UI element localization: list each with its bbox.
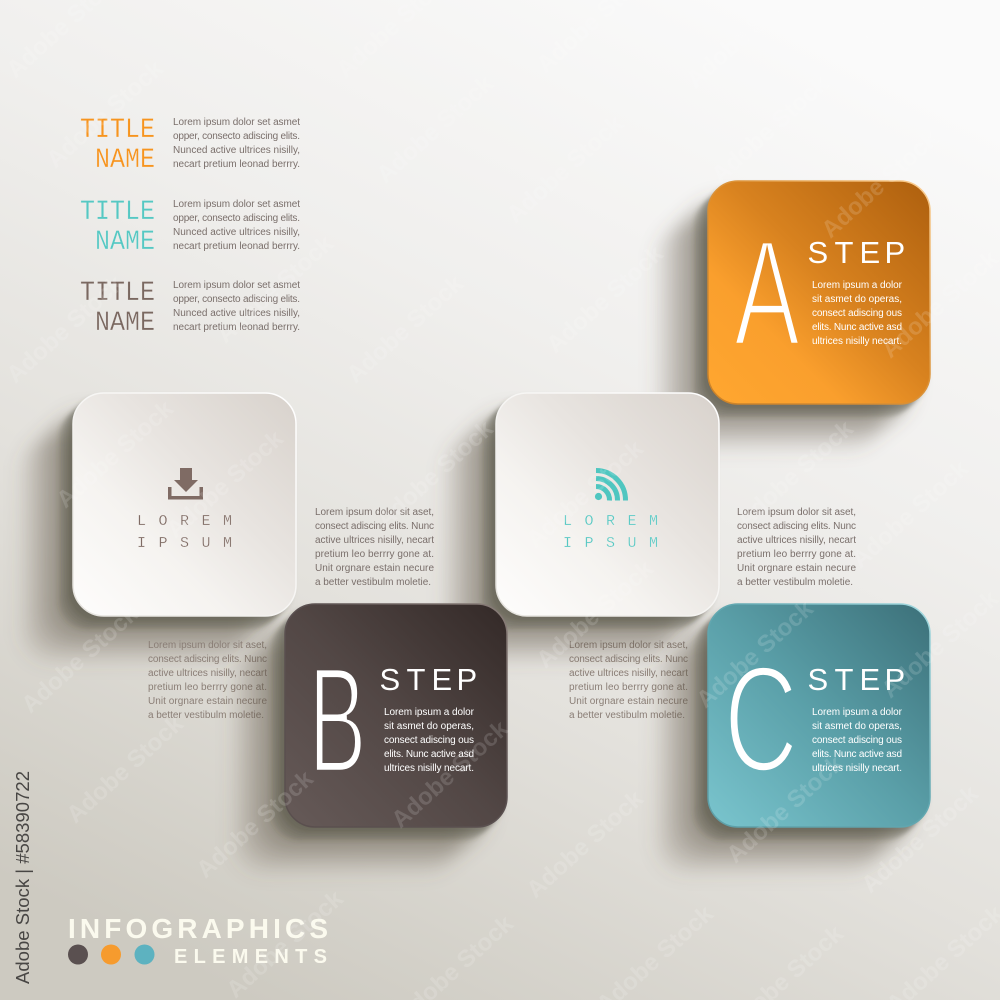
title: brown: [80, 278, 155, 339]
text block: right paragraph: consect adiscing elits. Nunc: [737, 521, 856, 532]
label: lorem ipsum: LOREM: [563, 513, 658, 530]
watermark: Adobe Stock: [191, 765, 319, 884]
text block: teal description: opper, consecto adiscing elits.: [173, 213, 300, 224]
text block: lower centre paragraph: pretium leo berrry gone at.: [569, 682, 688, 693]
text block: middle paragraph: consect adiscing elits. Nunc: [315, 521, 434, 532]
text block: right paragraph: a better vestibulm moletie.: [737, 577, 853, 588]
text block: brown description: Nunced active ultrices nisilly,: [173, 308, 300, 319]
text block: step C description: consect adiscing ous: [812, 735, 902, 746]
title: teal: NAME: [95, 227, 155, 258]
card surface: [708, 181, 930, 404]
text block: teal description: necart pretium leonad berrry.: [173, 241, 300, 252]
text block: step B description: elits. Nunc active asd: [384, 749, 474, 760]
text block: step A description: ultrices nisilly necart.: [812, 336, 902, 347]
letter C: C: [724, 634, 798, 803]
shadow: card A: [656, 184, 928, 450]
watermark: Adobe Stock: [856, 780, 984, 899]
title: teal: [80, 197, 155, 258]
watermark: Adobe Stock: [501, 110, 629, 229]
watermark: Adobe Stock: [706, 70, 834, 189]
watermark: Adobe Stock: [521, 785, 649, 904]
shadow: card B: [233, 607, 505, 873]
text block: lower centre paragraph: active ultrices nisilly, necart: [569, 668, 688, 679]
icon: signal: [595, 470, 626, 500]
text block: step A description: elits. Nunc active asd: [812, 322, 902, 333]
stock id vertical label: Adobe Stock | #58390722: [12, 771, 33, 984]
text block: teal description: [173, 199, 300, 252]
letter B: B: [308, 635, 366, 804]
text block: lower centre paragraph: a better vestibulm moletie.: [569, 710, 685, 721]
watermark: Adobe Stock: [731, 415, 859, 534]
text block: lower centre paragraph: Unit orgnare estain necure: [569, 696, 688, 707]
card surface: [708, 604, 930, 827]
watermark: Adobe Stock: [1, 270, 129, 389]
watermark: Adobe Stock: [876, 585, 1000, 704]
title: brown: TITLE: [80, 278, 155, 309]
panel: step B: [285, 604, 507, 827]
watermark: Adobe Stock: [41, 55, 169, 174]
text block: right paragraph: Lorem ipsum dolor sit aset,: [737, 507, 856, 518]
text block: right paragraph: [737, 507, 856, 588]
card surface: [285, 604, 507, 827]
watermark: Adobe Stock: [541, 240, 669, 359]
heading: step: STEP: [808, 235, 905, 270]
panel: white download card: [73, 393, 296, 616]
text block: orange description: necart pretium leonad berrry.: [173, 159, 300, 170]
watermark: Adobe Stock: [51, 395, 179, 514]
title: orange: [80, 115, 155, 176]
text block: lower left paragraph: consect adiscing elits. Nunc: [148, 654, 267, 665]
text block: lower centre paragraph: Lorem ipsum dolor sit aset,: [569, 640, 688, 651]
panel: step A: [708, 181, 930, 404]
text block: teal description: Nunced active ultrices nisilly,: [173, 227, 300, 238]
text block: middle paragraph: Unit orgnare estain necure: [315, 563, 434, 574]
label: lorem ipsum: [137, 513, 232, 552]
text block: brown description: Lorem ipsum dolor set asmet: [173, 280, 300, 291]
watermark: Adobe Stock: [161, 425, 289, 544]
text block: lower left paragraph: a better vestibulm moletie.: [148, 710, 264, 721]
text block: step C description: elits. Nunc active asd: [812, 749, 902, 760]
text block: lower left paragraph: Unit orgnare estain necure: [148, 696, 267, 707]
card surface: [496, 393, 719, 616]
watermark: Adobe Stock: [691, 595, 819, 714]
watermark: Adobe Stock: [61, 710, 189, 829]
heading: step: STEP: [380, 662, 477, 697]
label: lorem ipsum: IPSUM: [563, 535, 658, 552]
footer heading: elements: ELEMENTS: [174, 946, 327, 968]
label: lorem ipsum: IPSUM: [137, 535, 232, 552]
text block: step B description: [384, 707, 475, 774]
text block: step B description: sit asmet do operas,: [384, 721, 474, 732]
text block: brown description: [173, 280, 300, 333]
watermark: Adobe Stock: [816, 125, 944, 244]
shadow: white card left: [21, 396, 293, 662]
text block: lower left paragraph: [148, 640, 267, 721]
label: lorem ipsum: LOREM: [137, 513, 232, 530]
legend: orange title block: [80, 115, 300, 176]
text block: step C description: sit asmet do operas,: [812, 721, 902, 732]
watermark: Adobe Stock: [16, 600, 144, 719]
text block: teal description: Lorem ipsum dolor set asmet: [173, 199, 300, 210]
panel: white signal card: [496, 393, 719, 616]
heading: step: STEP: [808, 662, 905, 697]
text block: step C description: Lorem ipsum a dolor: [812, 707, 903, 718]
text block: lower left paragraph: active ultrices nisilly, necart: [148, 668, 267, 679]
watermark: Adobe Stock: [876, 245, 1000, 364]
legend: brown title block: [80, 278, 300, 339]
text block: step B description: Lorem ipsum a dolor: [384, 707, 475, 718]
footer heading: infographics: INFOGRAPHICS: [68, 913, 328, 944]
text block: step A description: Lorem ipsum a dolor: [812, 280, 903, 291]
watermark: Adobe Stock: [211, 230, 339, 349]
icon: download: [168, 468, 203, 500]
text block: step A description: [812, 280, 903, 347]
text block: lower left paragraph: pretium leo berrry gone at.: [148, 682, 267, 693]
text block: middle paragraph: [315, 507, 434, 588]
text block: step C description: ultrices nisilly necart.: [812, 763, 902, 774]
watermark: Adobe Stock: [531, 555, 659, 674]
text block: orange description: [173, 117, 300, 170]
text block: step B description: consect adiscing ous: [384, 735, 474, 746]
title: brown: NAME: [95, 308, 155, 339]
shadow: card C: [656, 607, 928, 873]
text block: step A description: consect adiscing ous: [812, 308, 902, 319]
text block: middle paragraph: Lorem ipsum dolor sit aset,: [315, 507, 434, 518]
watermark: Adobe Stock: [521, 435, 649, 554]
text block: orange description: Nunced active ultrices nisilly,: [173, 145, 300, 156]
shadow: white card centre: [444, 396, 716, 662]
text block: right paragraph: pretium leo berrry gone at.: [737, 549, 856, 560]
text block: step B description: ultrices nisilly necart.: [384, 763, 474, 774]
text block: middle paragraph: a better vestibulm moletie.: [315, 577, 431, 588]
footer dots: [68, 944, 154, 964]
watermark: Adobe Stock: [371, 415, 499, 534]
legend: teal title block: [80, 197, 300, 258]
text block: brown description: opper, consecto adiscing elits.: [173, 294, 300, 305]
text block: right paragraph: Unit orgnare estain necure: [737, 563, 856, 574]
title: orange: NAME: [95, 145, 155, 176]
label: lorem ipsum: [563, 513, 658, 552]
watermark: Adobe Stock: [371, 70, 499, 189]
text block: middle paragraph: active ultrices nisilly, necart: [315, 535, 434, 546]
title: teal: TITLE: [80, 197, 155, 228]
panel: step C: [708, 604, 930, 827]
text block: middle paragraph: pretium leo berrry gone at.: [315, 549, 434, 560]
watermark: Adobe Stock: [341, 270, 469, 389]
watermark: Adobe Stock: [386, 715, 514, 834]
text block: lower left paragraph: Lorem ipsum dolor sit aset,: [148, 640, 267, 651]
title: orange: TITLE: [80, 115, 155, 146]
text block: brown description: necart pretium leonad berrry.: [173, 322, 300, 333]
text block: right paragraph: active ultrices nisilly, necart: [737, 535, 856, 546]
watermark: Adobe Stock: [721, 750, 849, 869]
text block: lower centre paragraph: [569, 640, 688, 721]
watermark: Adobe Stock: [221, 885, 349, 1000]
watermark: Adobe Stock: [846, 455, 974, 574]
text block: step A description: sit asmet do operas,: [812, 294, 902, 305]
text block: lower centre paragraph: consect adiscing elits. Nunc: [569, 654, 688, 665]
letter A: A: [734, 208, 800, 377]
text block: step C description: [812, 707, 903, 774]
card surface: [73, 393, 296, 616]
text block: orange description: Lorem ipsum dolor set asmet: [173, 117, 300, 128]
text block: orange description: opper, consecto adiscing elits.: [173, 131, 300, 142]
